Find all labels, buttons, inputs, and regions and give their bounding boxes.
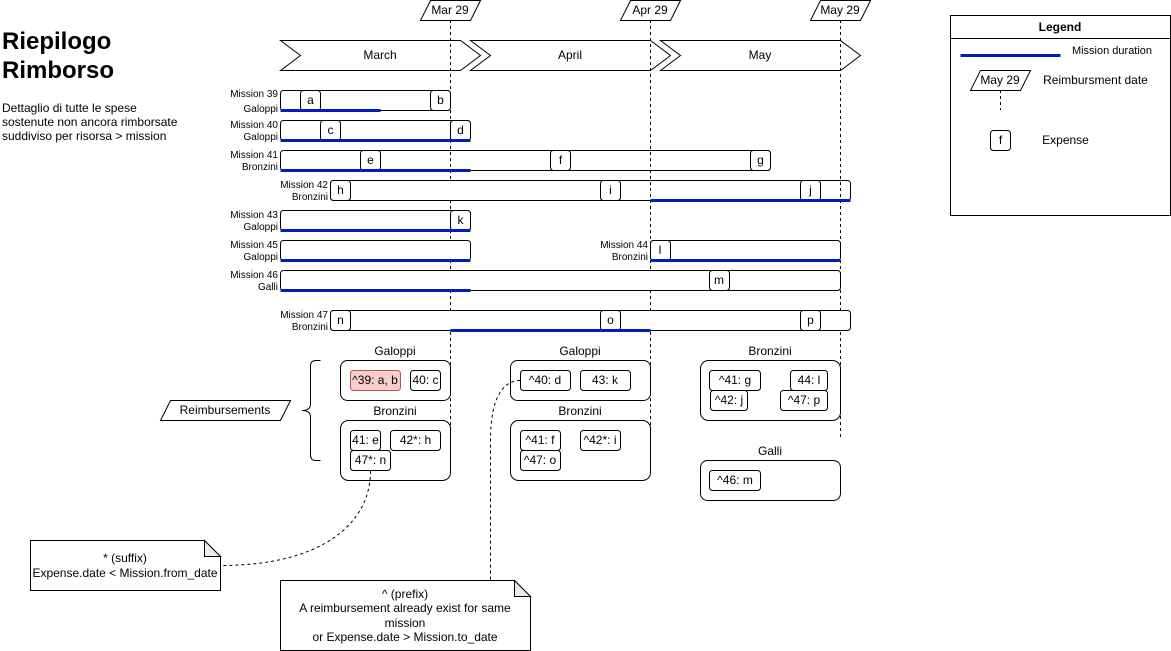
description text: suddiviso per risorsa > mission — [2, 129, 166, 143]
panel: April Galoppi — [510, 344, 650, 400]
month chevron: May — [660, 40, 860, 70]
panel: May Galli: ^46: m — [717, 473, 753, 487]
mission 41 row: g — [757, 153, 764, 167]
mission 40 row: c — [328, 123, 334, 137]
date marker: Mar 29 — [420, 0, 480, 425]
mission 42 row: h — [337, 183, 344, 197]
mission 40 row: Mission 40 — [230, 120, 278, 131]
mission 44 row: Mission 44 — [600, 240, 648, 251]
mission 41 row: e — [367, 153, 374, 167]
legend: May 29 — [980, 73, 1020, 87]
mission 39 row: Mission 39 — [230, 89, 278, 100]
panel: March Galoppi: 40: c — [412, 373, 439, 387]
panel: March Galoppi: Galoppi — [374, 344, 416, 358]
note: suffix: Expense.date < Mission.from_date — [32, 566, 218, 580]
mission 40 row: Galoppi — [244, 132, 278, 143]
panel: March Bronzini: Bronzini — [373, 404, 417, 418]
panel: April Bronzini: ^41: f — [526, 433, 555, 447]
mission 39 row: a — [307, 93, 314, 107]
title: Riepilogo — [2, 28, 111, 55]
title: Rimborso — [2, 57, 114, 84]
mission 43 row: Galoppi — [244, 222, 278, 233]
mission 46 row: m — [714, 273, 724, 287]
mission 46 row: Mission 46 — [230, 270, 278, 281]
note: prefix: A reimbursement already exist for same — [299, 601, 511, 615]
mission 41 row: f — [559, 153, 563, 167]
mission 47 row: Mission 47 — [280, 310, 328, 321]
panel: May Bronzini: ^41: g — [719, 373, 751, 387]
mission 46 row: Galli — [258, 282, 278, 293]
mission 45 row — [230, 240, 470, 263]
title — [2, 28, 114, 84]
mission 47 row — [280, 310, 850, 333]
mission 44 row — [600, 240, 840, 263]
connector: prefix note — [490, 380, 520, 580]
panel: April Galoppi: Galoppi — [559, 344, 601, 358]
panel: March Bronzini: 42*: h — [400, 433, 431, 447]
legend: Expense — [1042, 133, 1089, 147]
panel: March Galoppi: ^39: a, b — [352, 373, 398, 387]
description text: Dettaglio di tutte le spese — [2, 101, 137, 115]
panel: March Bronzini — [340, 404, 450, 480]
brace — [302, 360, 320, 460]
note: prefix — [280, 580, 530, 650]
note: prefix: ^ (prefix) — [382, 587, 428, 601]
mission 39 row — [230, 89, 450, 115]
mission 43 row: Mission 43 — [230, 210, 278, 221]
description text — [2, 101, 178, 143]
mission 47 row: o — [607, 313, 614, 327]
mission 41 row: Mission 41 — [230, 150, 278, 161]
panel: March Bronzini: 41: e — [352, 433, 379, 447]
mission 45 row: Mission 45 — [230, 240, 278, 251]
mission 44 row: l — [659, 243, 661, 257]
panel: April Bronzini — [510, 404, 650, 480]
legend: Reimbursment date — [1043, 73, 1148, 87]
reimbursements label: Reimbursements — [180, 403, 270, 417]
mission 46 row — [230, 270, 840, 293]
mission 47 row: Bronzini — [292, 322, 328, 333]
date line segments crossing upper rows — [450, 120, 840, 200]
connector: suffix note — [220, 471, 370, 566]
panel: May Bronzini: Bronzini — [748, 344, 792, 358]
description text: sostenute non ancora rimborsate — [2, 115, 178, 129]
note: prefix: mission — [385, 616, 425, 630]
mission 42 row: j — [808, 183, 812, 197]
note: suffix — [30, 540, 220, 590]
mission 42 row: i — [609, 183, 612, 197]
legend: f — [999, 133, 1003, 147]
date marker: Apr 29 — [620, 0, 680, 425]
mission 47 row: p — [807, 313, 814, 327]
month chevron: March: March — [363, 48, 397, 62]
panel: May Galli: Galli — [758, 444, 782, 458]
date marker: May 29: May 29 — [820, 3, 860, 17]
legend — [950, 16, 1170, 216]
panel: May Bronzini — [700, 344, 840, 420]
note: suffix: * (suffix) — [103, 551, 147, 565]
date marker: Apr 29: Apr 29 — [632, 3, 668, 17]
legend: Legend — [1039, 20, 1081, 34]
panel: March Bronzini: 47*: n — [355, 453, 386, 467]
reimbursements label — [160, 400, 290, 420]
panel: April Bronzini: Bronzini — [558, 404, 602, 418]
mission 44 row: Bronzini — [612, 252, 648, 263]
panel: May Bronzini: ^42: j — [715, 393, 743, 407]
note: prefix: or Expense.date > Mission.to_date — [312, 630, 498, 644]
month chevron: March — [280, 40, 480, 70]
mission 40 row: d — [457, 123, 464, 137]
date marker: Mar 29: Mar 29 — [431, 3, 469, 17]
panel: May Bronzini: ^47: p — [788, 393, 820, 407]
month chevron: May: May — [749, 48, 771, 62]
mission 42 row: Bronzini — [292, 192, 328, 203]
mission 47 row: n — [337, 313, 344, 327]
mission 43 row — [230, 210, 470, 233]
month chevron: April — [470, 40, 670, 70]
mission 41 row — [230, 150, 770, 173]
panel: April Galoppi: ^40: d — [529, 373, 561, 387]
mission 41 row: Bronzini — [242, 162, 278, 173]
mission 42 row — [280, 180, 850, 203]
panel: April Bronzini: ^42*: i — [584, 433, 616, 447]
month chevron: April: April — [558, 48, 582, 62]
mission 40 row — [230, 120, 470, 143]
mission 42 row: Mission 42 — [280, 180, 328, 191]
panel: May Galli — [700, 444, 840, 500]
panel: May Bronzini: 44: l — [798, 373, 820, 387]
mission 43 row: k — [458, 213, 464, 227]
panel: April Galoppi: 43: k — [592, 373, 619, 387]
date marker: May 29 — [810, 0, 870, 437]
mission 39 row: b — [437, 93, 444, 107]
panel: April Bronzini: ^47: o — [524, 453, 556, 467]
mission 45 row: Galoppi — [244, 252, 278, 263]
panel: March Galoppi — [340, 344, 450, 400]
legend: Mission duration — [1072, 45, 1152, 57]
mission 39 row: Galoppi — [244, 104, 278, 115]
